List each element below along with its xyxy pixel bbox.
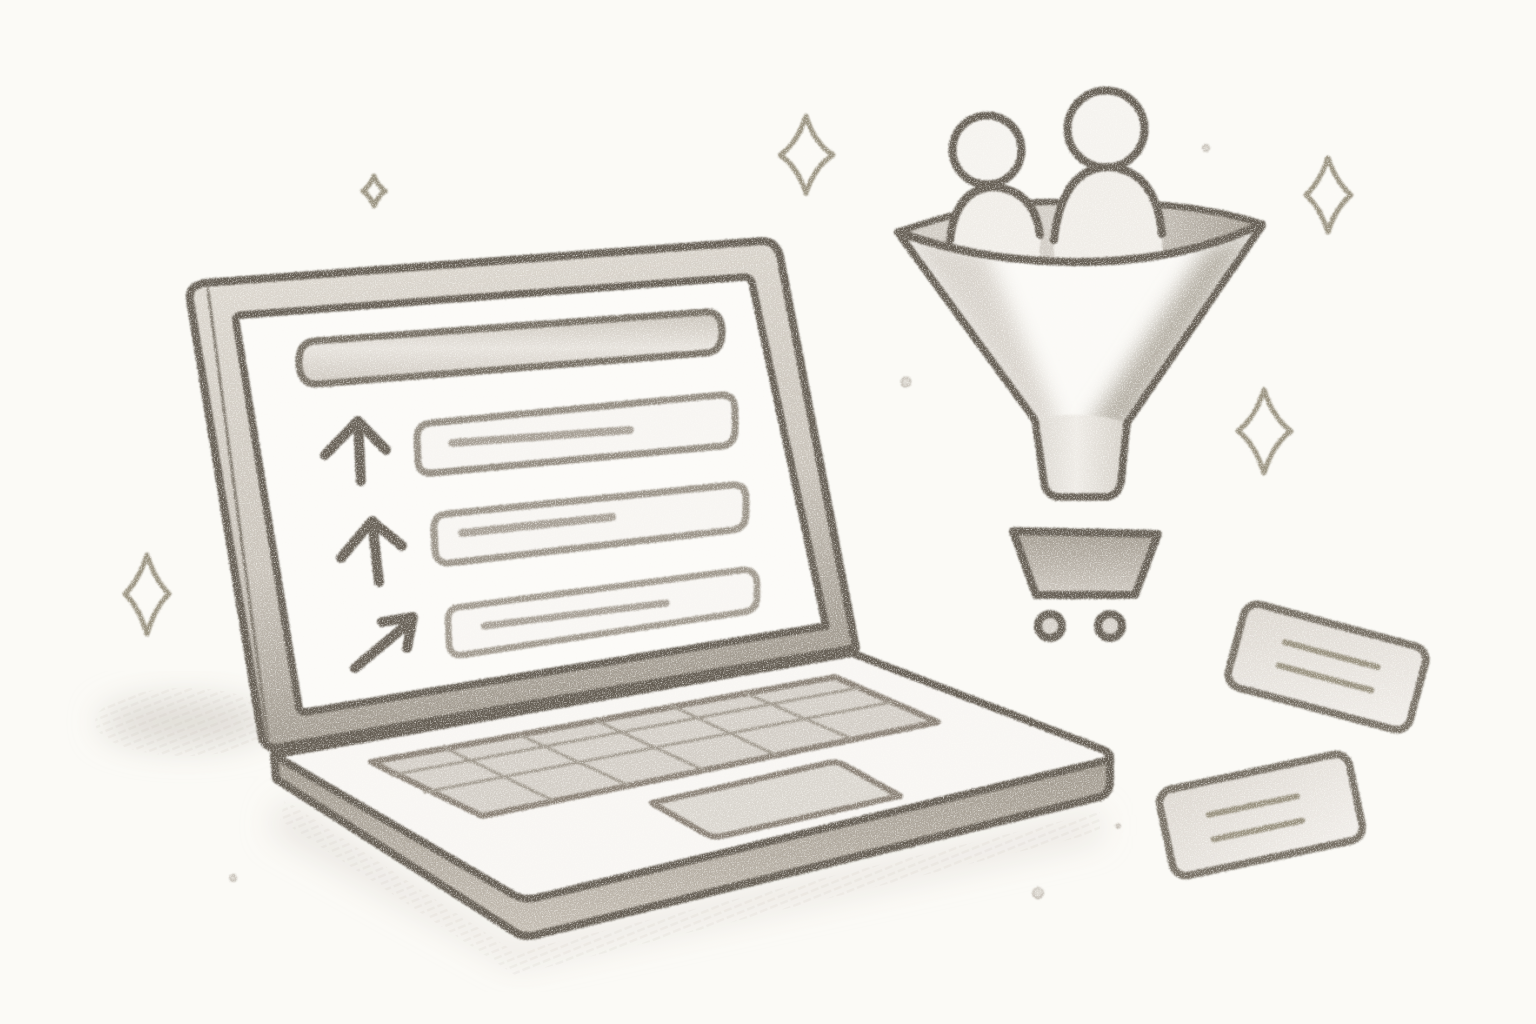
sparkle small top xyxy=(363,176,385,206)
cone shading xyxy=(909,232,1252,422)
arrow up 2 xyxy=(341,521,402,582)
result row 2 xyxy=(434,485,746,563)
person left xyxy=(950,116,1040,260)
specks xyxy=(230,145,1209,898)
result row 3 xyxy=(448,570,757,655)
sparkles xyxy=(125,116,1351,634)
shopping cart xyxy=(1013,531,1158,638)
illustration: laptop search ranking and conversion funnel xyxy=(95,85,1431,974)
arrow diagonal xyxy=(355,617,413,668)
card upper right xyxy=(1225,601,1429,733)
funnel neck xyxy=(1035,415,1127,497)
funnel front rim xyxy=(898,224,1262,262)
soft pencil shadows xyxy=(95,688,1100,975)
arrow up 1 xyxy=(325,421,386,481)
sparkle top centre xyxy=(780,116,833,193)
laptop lid xyxy=(190,241,856,748)
trackpad xyxy=(652,762,900,837)
laptop base xyxy=(274,653,1110,936)
funnel outline xyxy=(899,226,1262,497)
laptop screen xyxy=(236,277,826,712)
sparkle left xyxy=(125,555,169,634)
laptop xyxy=(190,241,1110,936)
person right xyxy=(1054,90,1162,262)
result row 1 xyxy=(417,395,735,473)
keyboard xyxy=(371,677,938,816)
sparkle top right xyxy=(1306,158,1351,232)
funnel with people xyxy=(898,90,1262,638)
bezel shading xyxy=(275,630,852,744)
sparkle right xyxy=(1238,390,1291,473)
card lower right xyxy=(1157,752,1365,878)
funnel cone xyxy=(899,224,1262,423)
search bar xyxy=(299,312,722,384)
funnel rim opening xyxy=(898,202,1262,262)
